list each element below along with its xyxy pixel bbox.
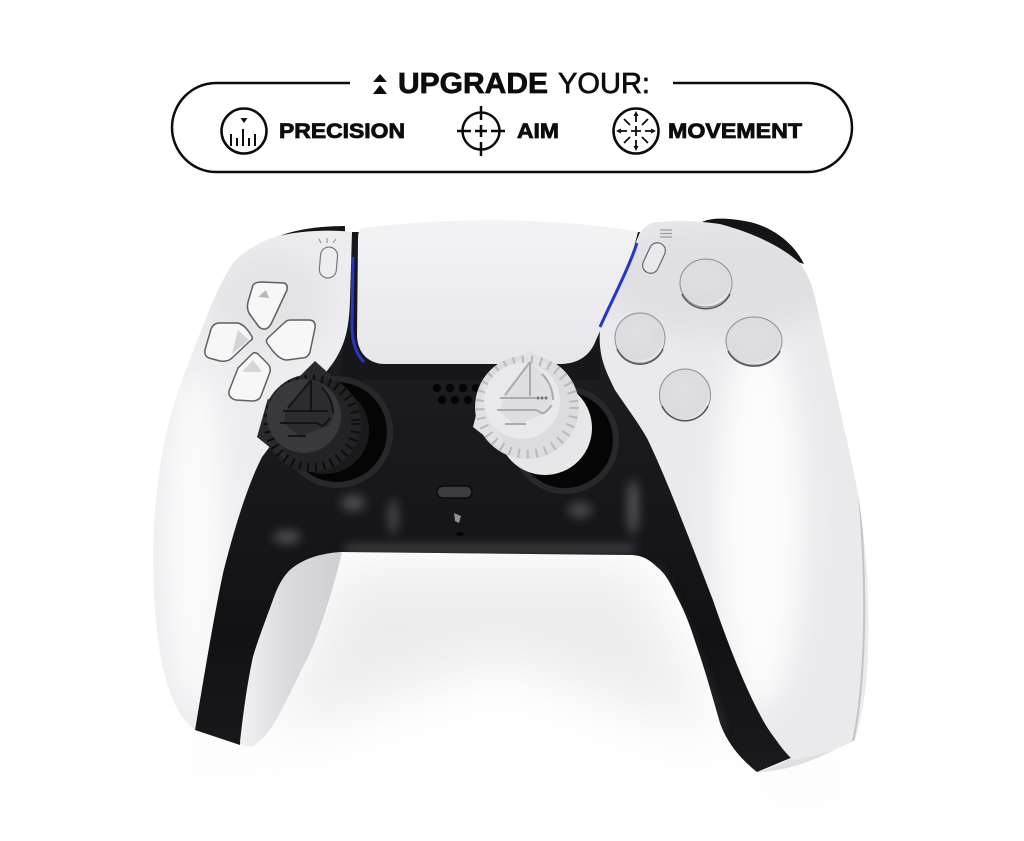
center black core — [195, 330, 793, 772]
infographic canvas — [154, 72, 868, 772]
left inner grip — [240, 552, 342, 747]
mic indicator — [454, 513, 461, 523]
left outer shell — [154, 230, 352, 730]
banner pill outline — [172, 83, 852, 172]
icon: double up arrows — [373, 74, 387, 94]
blue light bars — [352, 243, 637, 362]
right small button — [640, 230, 672, 276]
right stick socket — [511, 386, 619, 494]
left stick socket — [281, 376, 393, 488]
controller — [140, 215, 880, 785]
mic hole — [456, 532, 464, 536]
heading: upgrade your: YOUR: — [558, 68, 650, 100]
white thumbstick cap — [473, 350, 592, 475]
icon: movement arrows — [614, 108, 658, 154]
heading: upgrade your: UPGRADE — [398, 68, 548, 100]
icon: aim crosshair — [457, 106, 505, 156]
touchpad — [357, 220, 638, 364]
shoulder bumpers — [272, 219, 804, 264]
core highlights — [273, 479, 722, 730]
label: aim: AIM — [517, 120, 559, 143]
banner: upgrade your — [172, 68, 852, 172]
black thumbstick cap — [257, 361, 369, 474]
d-pad — [205, 282, 315, 401]
label: movement: MOVEMENT — [668, 120, 802, 143]
left small button — [319, 238, 338, 279]
ground shadow — [185, 565, 845, 785]
icon: precision — [222, 108, 266, 154]
create pill button — [437, 486, 472, 498]
right lower sliver — [757, 736, 857, 772]
label: precision: PRECISION — [279, 120, 405, 143]
right outer shell — [600, 221, 868, 760]
face buttons — [615, 259, 782, 421]
dark panel behind touchpad — [340, 232, 640, 380]
speaker grille — [433, 384, 485, 404]
